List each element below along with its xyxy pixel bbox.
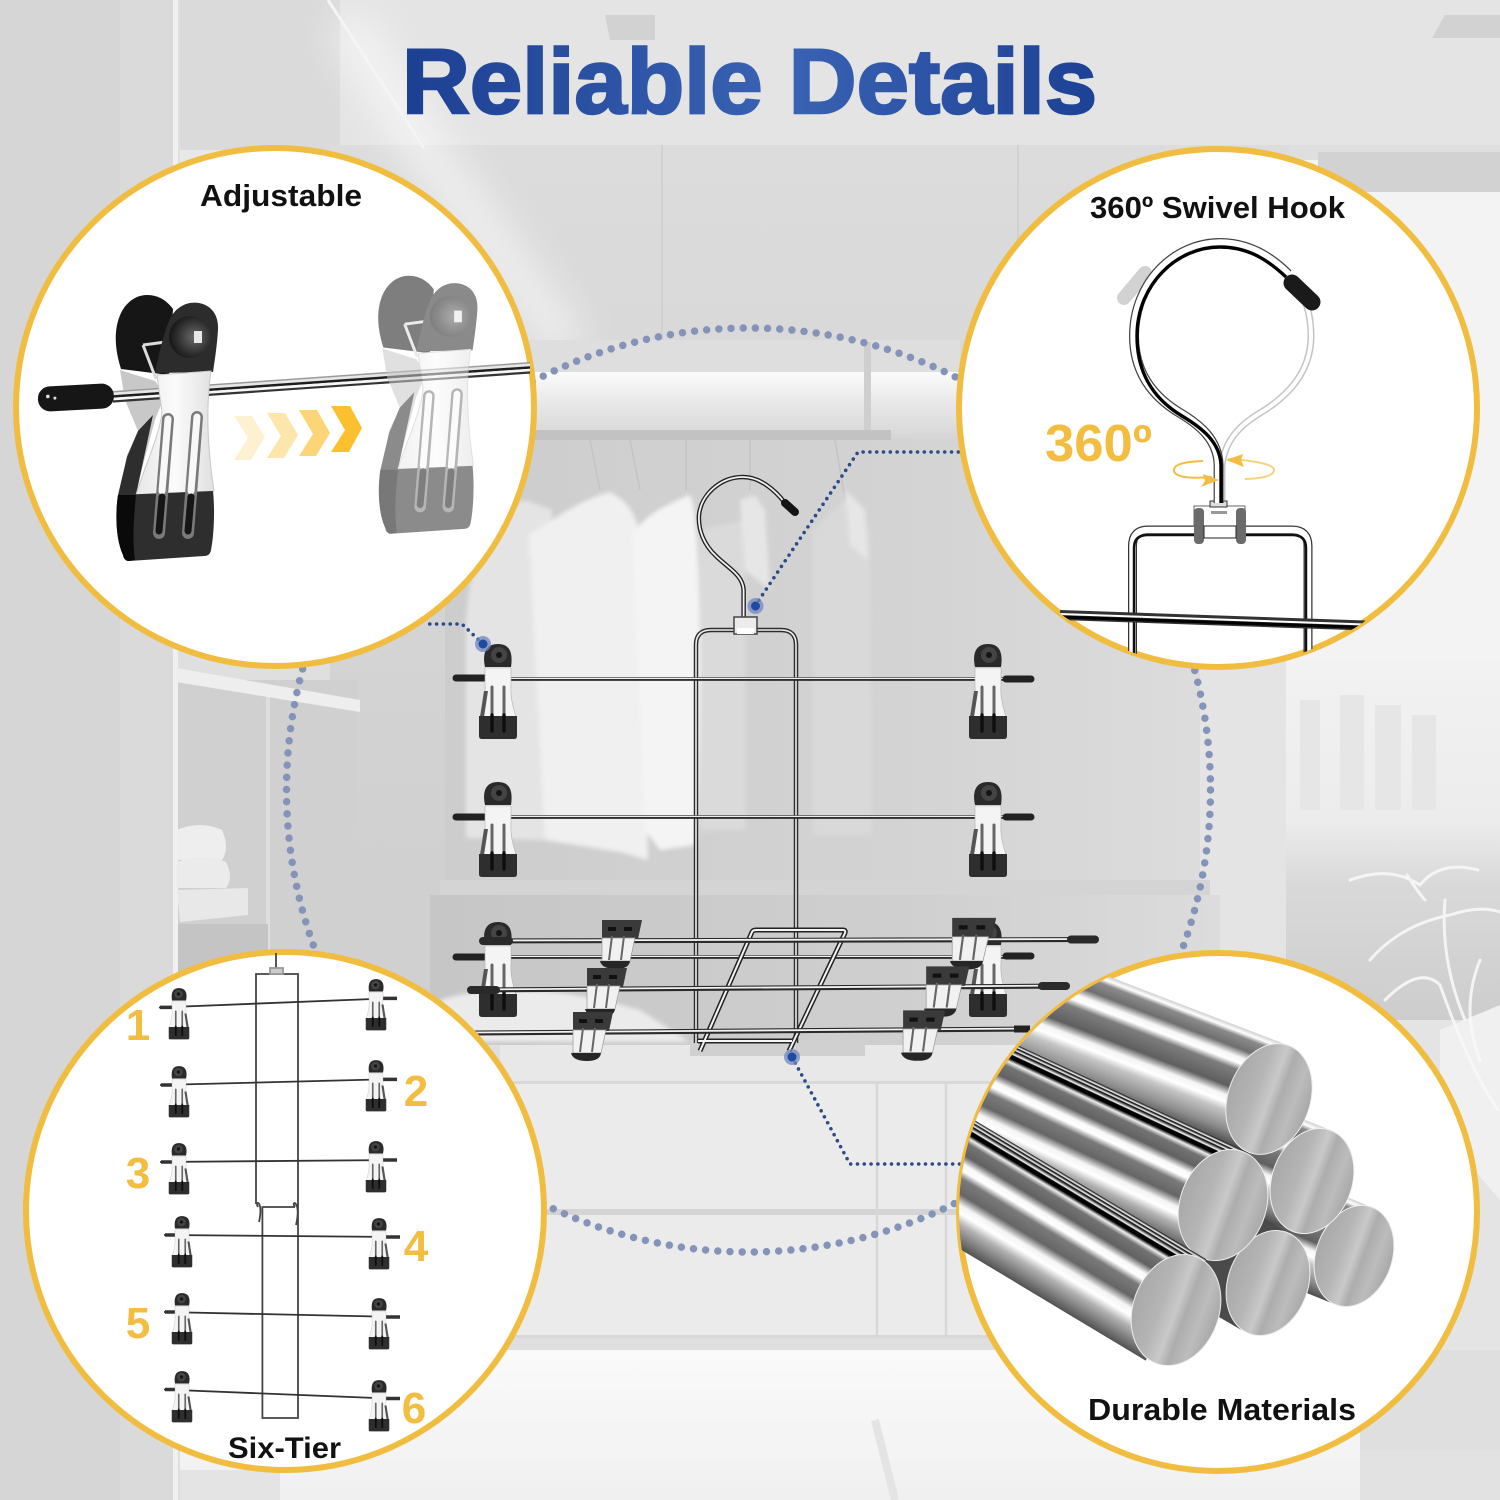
heading: 360º Swivel Hook: [1090, 190, 1346, 225]
folded-out hanger frame: [256, 953, 298, 1418]
movement arrows: [234, 406, 362, 460]
circle frame: [959, 953, 1477, 1471]
clips tier 6: [164, 1371, 400, 1431]
clips tier 2: [160, 1060, 397, 1117]
ghost hook: [1124, 273, 1311, 500]
tier 2 rod with clips: [456, 782, 1031, 877]
clip front: [116, 303, 218, 561]
heading: Adjustable: [200, 178, 362, 213]
360 degree label: 360º: [1045, 415, 1152, 473]
faded clip at new position: [378, 276, 477, 534]
panel: adjustable: [16, 148, 534, 666]
clips tier 3: [160, 1141, 397, 1194]
plant: [1350, 867, 1500, 1110]
shelf with towels: [176, 668, 360, 1010]
circle frame: [959, 149, 1477, 667]
tier numbers: 5: [126, 1299, 150, 1348]
title: Reliable Details: [402, 31, 1097, 133]
stack of steel rods: [959, 976, 1394, 1366]
hanger frame detail: [1060, 530, 1365, 670]
folded tiers: [469, 918, 1097, 1061]
swivel clasp: [734, 617, 757, 634]
callout anchor dots: [475, 598, 800, 1065]
heading: Durable Materials: [1088, 1392, 1356, 1427]
swivel clasp: [1194, 501, 1246, 544]
tier numbers: 1: [126, 1001, 150, 1050]
panel: durable materials: [956, 950, 1480, 1474]
clips tier 5: [164, 1293, 400, 1349]
clip back wing: [116, 295, 173, 495]
clips tier 4: [164, 1216, 400, 1269]
tier 1 rod with clips: [456, 644, 1031, 739]
sliding rod: [113, 363, 530, 402]
tier numbers: 2: [404, 1067, 428, 1116]
hanger frame: [696, 630, 796, 1043]
hook: [699, 477, 795, 618]
tier numbers: 4: [404, 1222, 429, 1271]
rotation arrows: [1174, 454, 1274, 487]
rod end cap: [37, 383, 115, 412]
tier 3 rod with clips: [456, 922, 1031, 1017]
tier numbers: 6: [402, 1384, 426, 1433]
large dotted ring connecting the callouts: [286, 328, 1210, 1252]
panel: six-tier: [26, 952, 544, 1470]
central six-tier hanger: [456, 477, 1097, 1065]
lower cabinet and counter: [180, 880, 1500, 1500]
panel: 360 swivel hook: [959, 149, 1477, 670]
circle frame: [16, 148, 534, 666]
heading: Six-Tier: [228, 1432, 341, 1465]
shirts in wardrobe: [466, 490, 872, 860]
swivel hook: [1134, 243, 1312, 503]
callout leader lines: [425, 452, 962, 1164]
tier numbers: 3: [126, 1149, 150, 1198]
tier numbers: [126, 1001, 429, 1433]
circle frame: [26, 952, 544, 1470]
clips tier 1: [159, 979, 397, 1039]
